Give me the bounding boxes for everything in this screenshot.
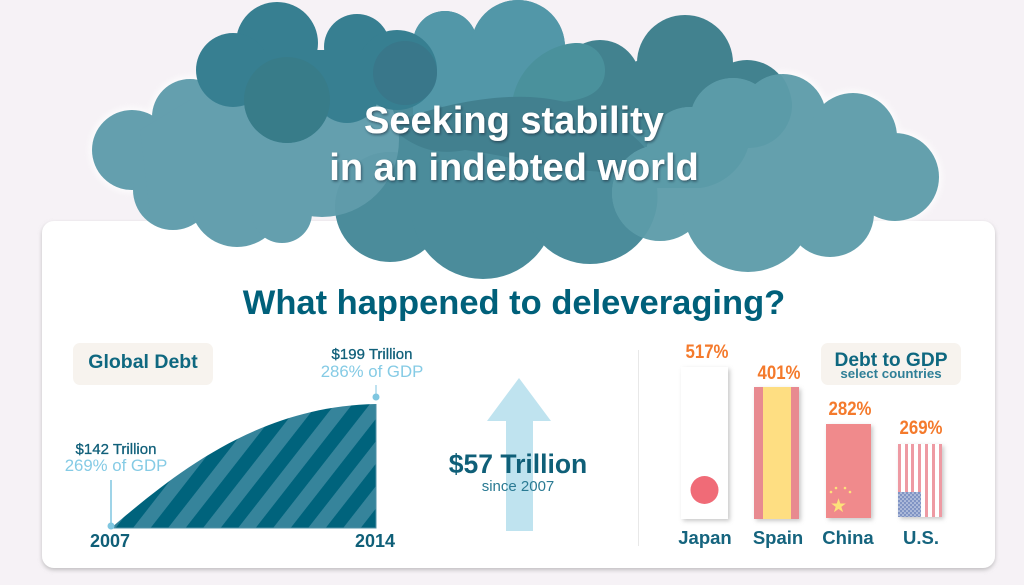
axis labels: 2014 xyxy=(355,531,395,551)
marker 2014 xyxy=(372,385,380,400)
country labels: China xyxy=(822,527,874,548)
cloud halo xyxy=(89,71,942,224)
bar values xyxy=(686,342,943,439)
bar values: 401% xyxy=(758,363,801,384)
callout: 2007 value xyxy=(65,441,167,475)
callout: 2007 value: $142 Trillion xyxy=(76,441,156,458)
axis labels: 2007 xyxy=(90,531,130,551)
country labels: Spain xyxy=(753,527,803,548)
cloud: left light xyxy=(92,63,399,247)
cloud: middle xyxy=(335,0,670,279)
cloud: right light xyxy=(612,74,939,272)
arrow: increase xyxy=(487,378,551,531)
country labels: Japan xyxy=(678,527,732,548)
cloud: right darker xyxy=(550,15,790,146)
bar values: 517% xyxy=(686,342,729,363)
label: global debt xyxy=(73,343,213,385)
callout: 2014 value: 286% of GDP xyxy=(321,362,423,381)
title: Seeking stability xyxy=(364,100,664,142)
marker 2007 xyxy=(108,480,114,530)
cloud: dark band xyxy=(400,97,660,173)
panel: white card xyxy=(42,221,995,568)
illustration: storm cloud xyxy=(92,0,939,279)
title xyxy=(329,100,699,189)
callout: $57 trillion: $57 Trillion xyxy=(449,449,587,479)
bar: China flag xyxy=(826,424,871,518)
cloud: upper tint xyxy=(413,0,565,115)
country labels xyxy=(678,527,939,548)
area chart: global debt xyxy=(90,385,395,551)
cloud: top dark xyxy=(196,2,437,143)
cloud: green lobe xyxy=(512,43,605,105)
country labels: U.S. xyxy=(903,527,939,548)
heading: What happened to deleveraging? xyxy=(243,284,785,322)
axis labels xyxy=(90,531,395,551)
title: in an indebted world xyxy=(329,147,699,189)
callout: $57 trillion: since 2007 xyxy=(482,478,554,495)
label: debt to gdp: Debt to GDP xyxy=(834,350,948,371)
bar: Japan flag xyxy=(681,367,728,519)
bar values: 282% xyxy=(828,399,872,420)
callout: 2014 value: $199 Trillion xyxy=(332,346,412,363)
label: debt to gdp: select countries xyxy=(840,366,942,381)
bar: US flag xyxy=(898,444,942,517)
label: debt to gdp xyxy=(821,343,961,385)
callout: 2014 value xyxy=(321,346,423,381)
cloud: right overlap tint xyxy=(612,74,792,238)
bar: China flag: ★ xyxy=(830,496,847,517)
bar values: 269% xyxy=(900,418,943,439)
callout: $57 trillion xyxy=(449,449,587,495)
label: global debt: Global Debt xyxy=(88,351,198,373)
callout: 2007 value: 269% of GDP xyxy=(65,456,167,475)
bar: Spain flag xyxy=(754,387,799,519)
